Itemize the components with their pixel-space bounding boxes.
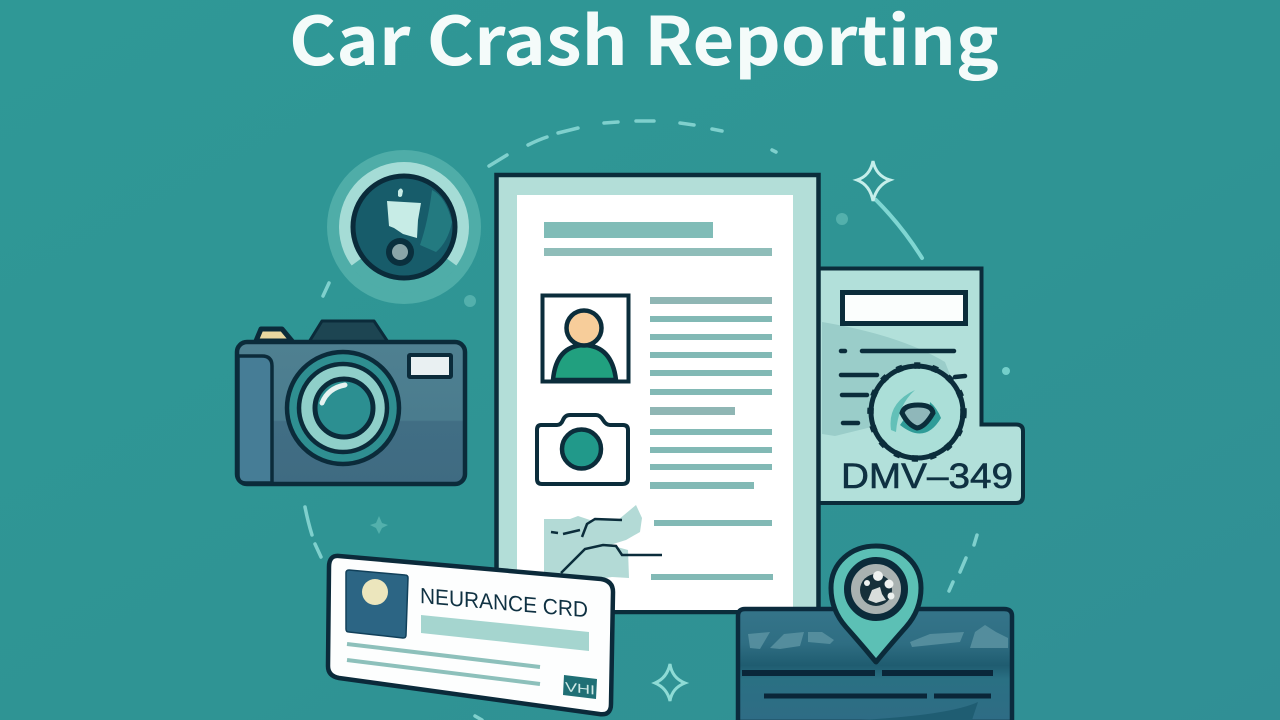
card photo block — [346, 570, 408, 638]
location pin — [831, 546, 921, 662]
form code label: DMV–349 — [841, 457, 1013, 496]
main report document — [496, 175, 818, 612]
small camera icon — [537, 415, 628, 484]
location map panel — [738, 609, 1012, 720]
map terrain shapes — [748, 625, 1008, 649]
camera lens — [287, 352, 399, 464]
insurance card — [328, 556, 613, 714]
form title box — [842, 292, 966, 324]
alert badge — [327, 150, 481, 304]
card lines — [347, 615, 589, 684]
card body — [328, 556, 613, 714]
camera grip — [238, 356, 272, 483]
icon: exclamation mark — [386, 188, 421, 266]
crash sketch — [544, 505, 662, 580]
dashed orbit arcs — [305, 121, 977, 720]
camera body — [237, 342, 465, 484]
form sheet — [818, 268, 1023, 503]
card stamp: VHI — [565, 679, 595, 698]
camera flash button — [256, 329, 292, 341]
round seal — [870, 366, 964, 458]
document heading bars — [544, 222, 772, 256]
map card — [738, 609, 1012, 720]
form text lines — [841, 351, 965, 423]
card stamp — [563, 675, 597, 699]
document white page — [517, 195, 793, 610]
bottom sparkle star — [655, 664, 685, 701]
pin inner symbol — [860, 571, 894, 606]
portrait photo — [542, 296, 628, 382]
card title: NEURANCE CRD — [420, 583, 588, 622]
camera illustration — [237, 321, 465, 484]
map roads — [742, 673, 993, 696]
sparkle dots — [370, 213, 1010, 534]
camera top hump — [309, 321, 388, 342]
sparkle: top right star with tail — [857, 161, 922, 258]
DMV-349 form — [818, 268, 1023, 503]
text lines — [650, 297, 773, 580]
document sheet — [496, 175, 818, 612]
camera viewfinder — [409, 355, 451, 377]
